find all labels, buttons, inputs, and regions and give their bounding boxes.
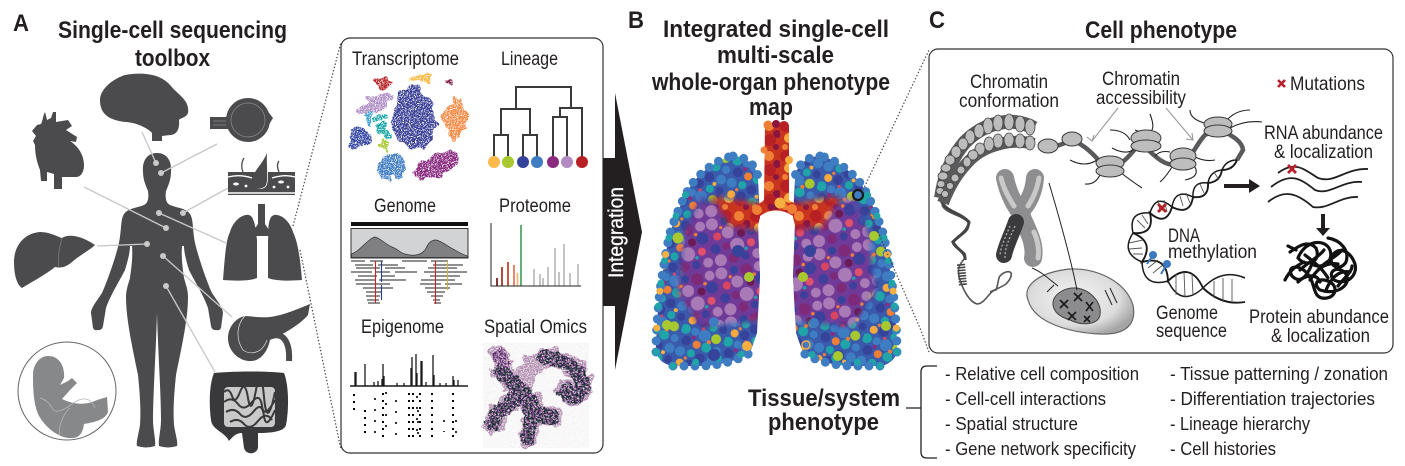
- inner purple cells: [670, 190, 885, 330]
- icon: brain: [100, 74, 188, 141]
- human body silhouette: [91, 153, 223, 448]
- list: phenotype features, column 1: [945, 364, 1139, 459]
- label: chromatin conformation: Chromatin: [970, 72, 1048, 93]
- heading: cell phenotype: Cell phenotype: [1085, 17, 1237, 44]
- panel letter B: B: [628, 7, 644, 34]
- list: phenotype features, column 1: - Cell-cell interactions: [945, 389, 1106, 409]
- trachea and bronchi: [741, 122, 812, 224]
- genome coverage and reads: [351, 222, 468, 304]
- panel: cell phenotype: [929, 49, 1393, 353]
- label: chromatin conformation: [959, 72, 1059, 112]
- icon: lungs: [223, 204, 302, 281]
- label: mutations: Mutations: [1290, 74, 1365, 95]
- heading: integrated phenotype map: map: [749, 94, 793, 121]
- trachea top cells: [752, 120, 797, 215]
- list: phenotype features, column 2: - Lineage hierarchy: [1170, 414, 1310, 434]
- DNA double helix: [1128, 160, 1245, 303]
- mutation mark on DNA: [1158, 204, 1166, 212]
- heading: single-cell sequencing toolbox: Single-cell sequencing: [58, 17, 287, 44]
- heading: single-cell sequencing toolbox: toolbox: [135, 45, 211, 72]
- chromosome: [1000, 178, 1039, 258]
- list: phenotype features, column 2: [1170, 364, 1388, 459]
- heading: integrated phenotype map: [651, 16, 890, 121]
- t-SNE scatter plot: [349, 73, 467, 185]
- lung tissue, outer cells: [650, 150, 905, 370]
- integration arrow: [603, 93, 642, 370]
- label: chromatin accessibility: Chromatin: [1102, 69, 1180, 90]
- dotted zoom lines from lung icon to toolbox panel: [293, 42, 341, 450]
- dotted zoom lines from highlighted cell to phenotype panel: [863, 50, 929, 352]
- label: tissue/system phenotype: [748, 385, 900, 436]
- label: tissue/system phenotype: phenotype: [768, 409, 879, 436]
- label: protein abundance and localization: [1249, 307, 1389, 347]
- list: phenotype features, column 1: - Spatial structure: [945, 414, 1078, 434]
- human body with organ connector lines: [84, 132, 232, 448]
- label: RNA abundance and localization: RNA abundance: [1264, 123, 1383, 144]
- label: proteome: Proteome: [499, 196, 571, 217]
- label: spatial omics: Spatial Omics: [484, 317, 587, 338]
- label: tissue/system phenotype: Tissue/system: [748, 385, 900, 412]
- heading: integrated phenotype map: multi-scale: [717, 42, 834, 69]
- label: RNA abundance and localization: [1264, 123, 1383, 163]
- heading: single-cell sequencing toolbox: [58, 17, 287, 72]
- methylation marks: [1147, 252, 1170, 274]
- label: chromatin conformation: conformation: [959, 91, 1059, 112]
- RNA strands: [1268, 165, 1368, 207]
- epigenome peaks and raster: [350, 354, 468, 440]
- list: phenotype features, column 1: - Relative cell composition: [945, 364, 1139, 384]
- label: DNA methylation: DNA: [1168, 226, 1200, 247]
- list: phenotype features, column 2: - Differentiation trajectories: [1170, 389, 1375, 409]
- icon: fetus in womb: [18, 342, 116, 440]
- label: genome sequence: Genome: [1156, 303, 1218, 324]
- hilum red cells: [710, 192, 844, 234]
- label: chromatin accessibility: [1096, 69, 1186, 109]
- panel letter A: A: [13, 10, 29, 37]
- cell with nucleus: [1027, 183, 1134, 334]
- lineage tree: [488, 87, 588, 168]
- label: genome: Genome: [374, 196, 436, 217]
- list: phenotype features, column 2: - Tissue patterning / zonation: [1170, 364, 1388, 384]
- label: protein abundance and localization: & localization: [1271, 326, 1370, 347]
- nucleosomes and linker tails: [1038, 110, 1262, 188]
- icon: intestine: [210, 372, 288, 453]
- label: DNA methylation: [1168, 226, 1257, 263]
- arrow: RNA to protein: [1316, 214, 1330, 236]
- label: lineage: Lineage: [501, 49, 558, 70]
- label: epigenome: Epigenome: [361, 317, 444, 338]
- heading: integrated phenotype map: Integrated single-cell: [663, 16, 889, 43]
- highlighted cell: [853, 190, 863, 200]
- spatial omics image: [483, 343, 589, 448]
- heading: integrated phenotype map: whole-organ phenotype: [651, 69, 890, 96]
- label: genome sequence: [1156, 303, 1227, 342]
- icon: pancreas: [228, 304, 310, 361]
- accessibility pointer arrows: [1087, 108, 1193, 141]
- icon: heart: [32, 112, 84, 189]
- lung outline bumps: [656, 156, 897, 366]
- chromatin fiber: [936, 114, 1035, 304]
- label: transcriptome: Transcriptome: [352, 49, 459, 70]
- panel letter C: C: [929, 7, 945, 34]
- lung map of colored cells: [650, 120, 905, 370]
- icon: skin: [228, 153, 295, 195]
- list: phenotype features, column 2: - Cell histories: [1170, 439, 1276, 459]
- label: genome sequence: sequence: [1156, 321, 1227, 342]
- panel: omics toolbox: [341, 38, 603, 453]
- icon: eye: [210, 98, 273, 142]
- integration arrow: Integration: [605, 187, 628, 278]
- label: DNA methylation: methylation: [1168, 242, 1257, 263]
- tangled protein: [1285, 238, 1355, 298]
- accent cells: [662, 231, 891, 361]
- label: RNA abundance and localization: & localization: [1274, 142, 1373, 163]
- arrow: DNA to RNA: [1224, 179, 1260, 193]
- bracket: [906, 366, 937, 458]
- proteome spectrum bars: [491, 223, 581, 286]
- label: protein abundance and localization: Protein abundance: [1249, 307, 1389, 328]
- list: phenotype features, column 1: - Gene network specificity: [945, 439, 1136, 459]
- icon: liver: [14, 232, 95, 288]
- label: chromatin accessibility: accessibility: [1096, 88, 1186, 109]
